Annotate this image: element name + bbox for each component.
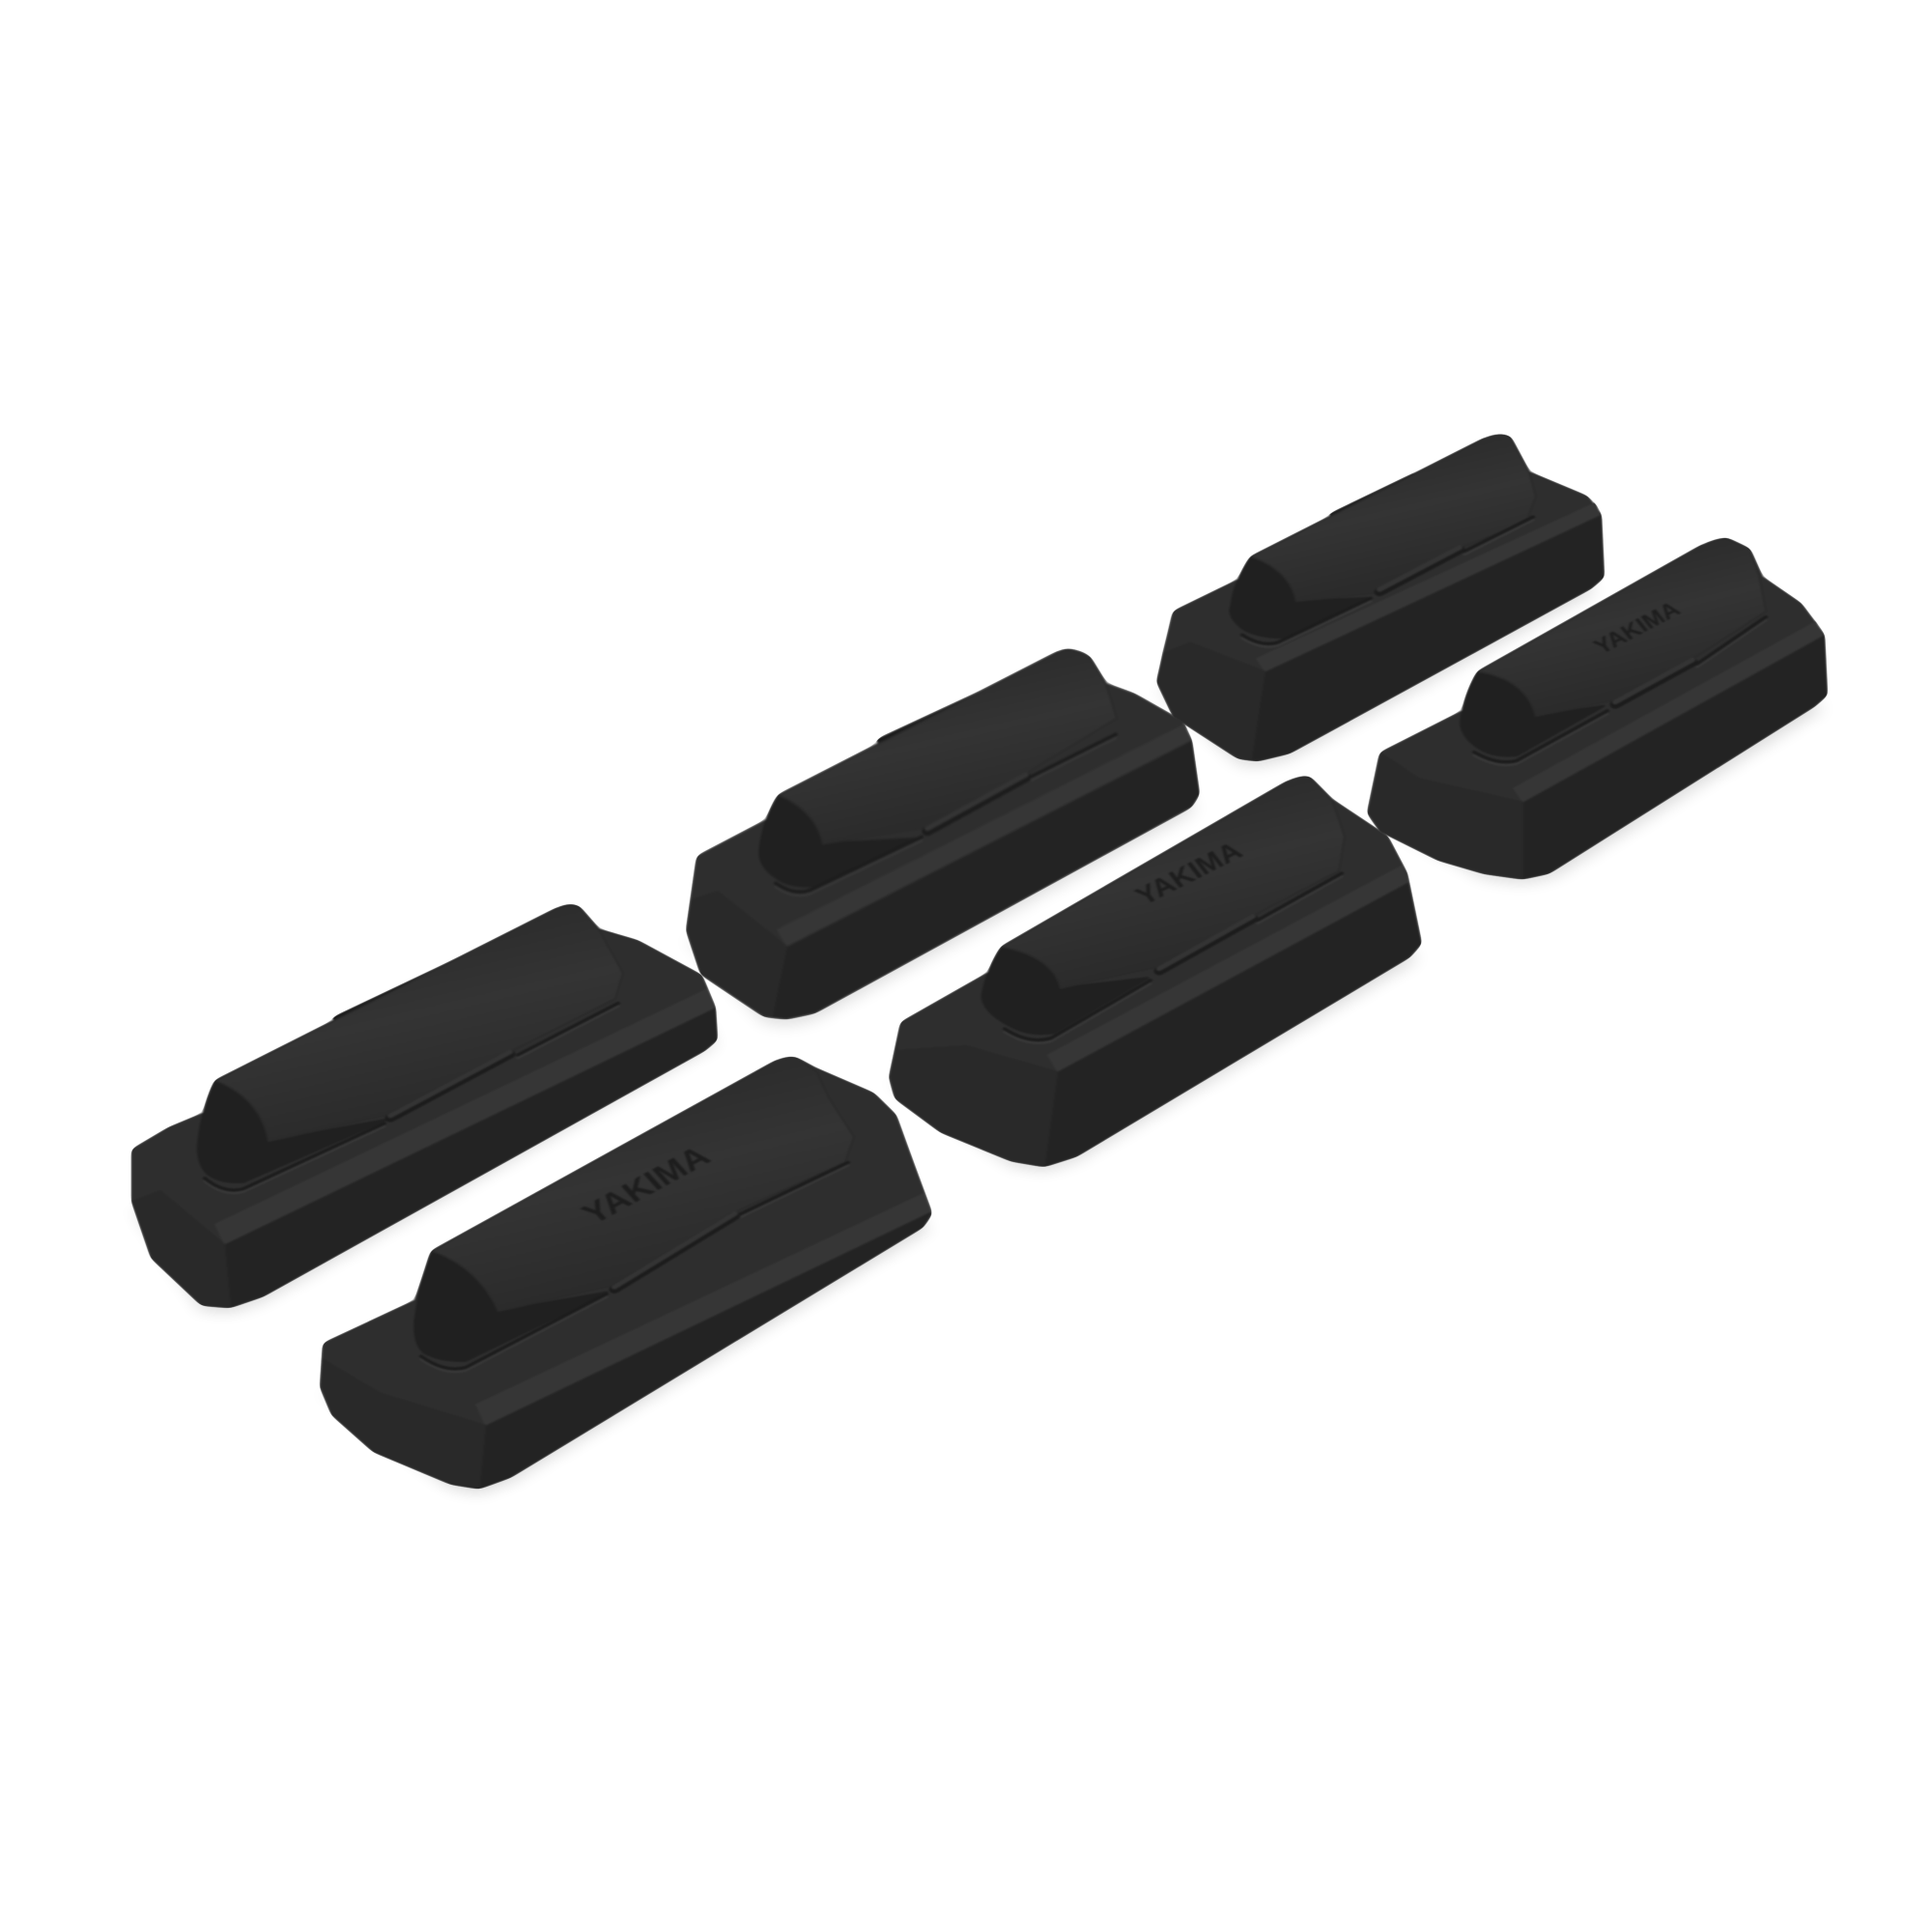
pad: front left back row, logo hidden (132, 904, 717, 1314)
pad: front left front row, logo visible (321, 1057, 931, 1494)
pad: top right, logo hidden (1157, 435, 1604, 767)
pad: centre front, logo visible (890, 777, 1421, 1172)
pad: centre back, logo hidden (687, 649, 1199, 1026)
logo: YAKIMA: YAKIMA (1589, 597, 1686, 659)
logo: YAKIMA: YAKIMA (1130, 837, 1248, 911)
pad: right, logo visible (1368, 538, 1827, 884)
logo: YAKIMA: YAKIMA (575, 1140, 718, 1231)
